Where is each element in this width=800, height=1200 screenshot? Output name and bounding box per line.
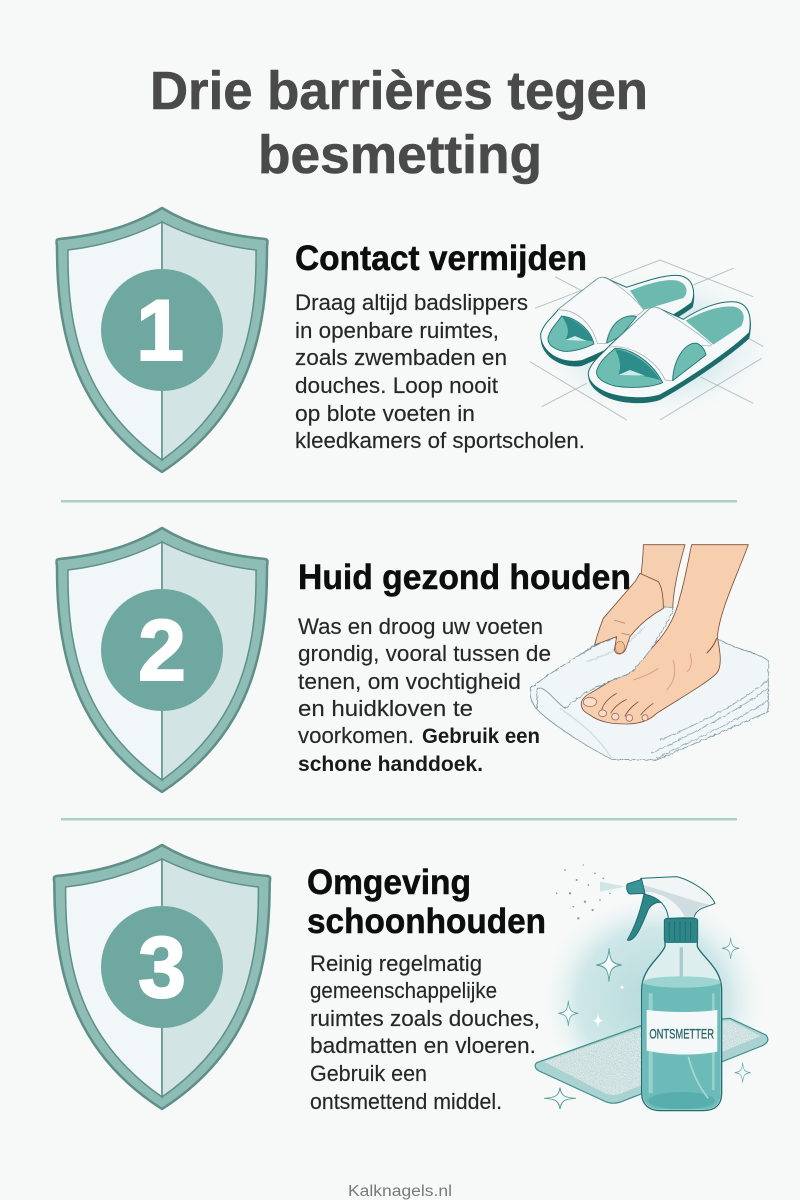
divider 2 bbox=[61, 818, 737, 820]
text block: huid gezond houden: Was en droog uw voeten bbox=[298, 614, 543, 639]
text block: omgeving schoonhouden: ruimtes zoals douches, bbox=[310, 1006, 540, 1031]
text block: omgeving schoonhouden: gemeenschappelijke bbox=[310, 978, 497, 1003]
label bbox=[647, 1010, 717, 1055]
text block: huid gezond houden: voorkomen. bbox=[298, 723, 414, 748]
text block: contact vermijden: in openbare ruimtes, bbox=[295, 318, 499, 343]
title bbox=[150, 61, 648, 185]
foot bbox=[581, 545, 748, 724]
towel lower bbox=[530, 640, 768, 760]
text block: huid gezond houden: en huidkloven te bbox=[298, 696, 473, 721]
icon: shield 3 bbox=[54, 845, 270, 1109]
trigger bbox=[627, 894, 662, 940]
text block: contact vermijden: douches. Loop nooit bbox=[295, 373, 498, 398]
text block: omgeving schoonhouden: Gebruik een bbox=[310, 1061, 427, 1086]
text block: omgeving schoonhouden: Reinig regelmatig bbox=[310, 951, 482, 976]
sparkles bbox=[544, 938, 751, 1109]
liquid bbox=[643, 977, 721, 1110]
icon: shield 3: 3 bbox=[138, 920, 186, 1016]
arm back bbox=[640, 545, 685, 612]
icon: shield 2: 2 bbox=[138, 603, 186, 699]
front slipper bbox=[588, 302, 751, 403]
icon: spray en badmat: ONTSMETTER bbox=[649, 1026, 714, 1042]
text block: huid gezond houden bbox=[298, 614, 551, 776]
icon: badslippers bbox=[530, 260, 777, 420]
bath mat bbox=[535, 1018, 768, 1103]
cap bbox=[664, 918, 698, 942]
hand bbox=[595, 573, 663, 654]
text block: contact vermijden: Draag altijd badslippers bbox=[295, 290, 528, 315]
icon: shield 2 bbox=[56, 528, 268, 792]
icon: shield 1 bbox=[56, 208, 268, 472]
spray head bbox=[641, 877, 715, 918]
heading: huid gezond houden: Huid gezond houden bbox=[298, 558, 631, 597]
text block: omgeving schoonhouden: badmatten en vloeren. bbox=[310, 1033, 536, 1058]
panel: contact vermijden bbox=[56, 208, 777, 472]
heading: omgeving schoonhouden bbox=[307, 863, 546, 941]
text block: huid gezond houden: Gebruik een bbox=[422, 724, 540, 748]
divider 1 bbox=[61, 500, 737, 502]
icon: spray en badmat bbox=[535, 864, 768, 1111]
text block: contact vermijden: zoals zwembaden en bbox=[295, 345, 507, 370]
back slipper bbox=[541, 275, 694, 366]
footer: Kalknagels.nl bbox=[348, 1183, 452, 1200]
heading: contact vermijden: Contact vermijden bbox=[295, 239, 587, 278]
icon: shield 1: 1 bbox=[136, 283, 184, 379]
title: besmetting bbox=[258, 125, 542, 185]
text block: omgeving schoonhouden: ontsmettend middel. bbox=[310, 1089, 502, 1114]
title: Drie barrières tegen bbox=[150, 61, 648, 121]
text block: omgeving schoonhouden bbox=[310, 951, 540, 1114]
heading: omgeving schoonhouden: schoonhouden bbox=[307, 902, 546, 941]
spray mist bbox=[600, 882, 625, 892]
panel: huid gezond houden bbox=[56, 528, 768, 792]
text block: huid gezond houden: schone handdoek. bbox=[298, 752, 483, 776]
text block: huid gezond houden: tenen, om vochtigheid bbox=[298, 669, 521, 694]
heading: omgeving schoonhouden: Omgeving bbox=[307, 863, 471, 902]
text block: huid gezond houden: grondig, vooral tussen de bbox=[298, 641, 551, 666]
bottle glass bbox=[642, 942, 722, 1111]
panel: omgeving schoonhouden bbox=[54, 845, 768, 1114]
text block: contact vermijden: kleedkamers of sportscholen. bbox=[295, 428, 585, 453]
icon: voet en handdoek bbox=[530, 545, 768, 760]
text block: contact vermijden: op blote voeten in bbox=[295, 401, 475, 426]
towel fold bbox=[530, 607, 674, 708]
text block: contact vermijden bbox=[295, 290, 585, 453]
